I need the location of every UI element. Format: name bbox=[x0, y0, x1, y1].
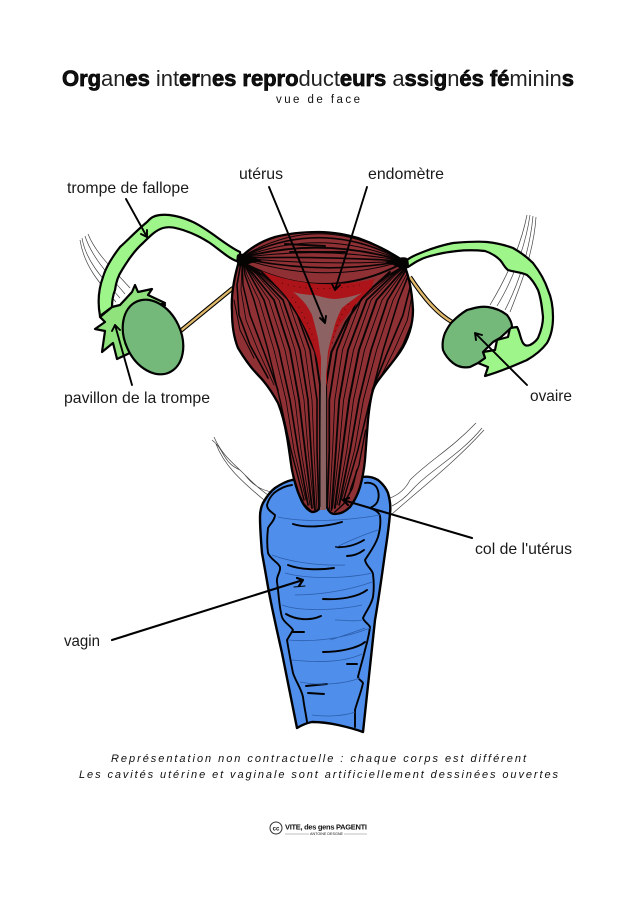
vagina bbox=[260, 477, 390, 732]
uterus bbox=[232, 232, 421, 514]
title: Organes internes reproducteurs assignés féminins bbox=[62, 66, 574, 91]
arrows bbox=[112, 187, 527, 640]
left ligament bbox=[178, 288, 233, 333]
arrow: uterus bbox=[269, 187, 326, 323]
arrow: vagina bbox=[112, 578, 303, 640]
right fallopian tube bbox=[407, 242, 553, 376]
right ovary bbox=[443, 307, 512, 367]
uterine horn knots bbox=[236, 254, 409, 270]
endometrium stipple bbox=[282, 283, 360, 345]
left fimbriae bbox=[95, 285, 165, 359]
muscle fibres bbox=[234, 234, 421, 512]
label: pavillon de la trompe: pavillon de la trompe bbox=[64, 390, 210, 407]
label: utérus: utérus bbox=[239, 166, 283, 183]
left tube bbox=[99, 215, 240, 316]
label: vagin: vagin bbox=[64, 633, 100, 650]
label: ovaire: ovaire bbox=[530, 388, 572, 405]
endometrium bbox=[262, 271, 375, 400]
right ligament bbox=[410, 277, 452, 322]
credit logo: VITE, des gens PAGENTI bbox=[285, 822, 367, 832]
arrow: ovary bbox=[475, 333, 527, 385]
uterus wall bbox=[232, 232, 413, 514]
arrow: fimbriae bbox=[112, 325, 132, 385]
credit logo: ANTOINE DESGNE bbox=[310, 832, 343, 836]
credit logo bbox=[270, 822, 367, 836]
ligament strands bbox=[80, 215, 536, 514]
label: trompe de fallope: trompe de fallope bbox=[67, 180, 189, 197]
uterus outline bbox=[232, 232, 413, 514]
label: col de l'utérus: col de l'utérus bbox=[475, 541, 572, 558]
uterine cavity bbox=[293, 292, 362, 510]
cervical slit edges bbox=[320, 395, 326, 507]
credit logo: cc bbox=[273, 826, 280, 832]
label: endomètre: endomètre bbox=[368, 166, 444, 183]
fine vaginal creases bbox=[272, 515, 380, 716]
left fallopian tube bbox=[95, 215, 240, 359]
subtitle: vue de face bbox=[276, 94, 360, 106]
caption: Représentation non contractuelle : chaque corps est différent bbox=[111, 753, 527, 765]
caption bbox=[79, 753, 558, 781]
arrow: endometrium bbox=[332, 187, 367, 290]
arrow: fallopian tube bbox=[126, 199, 147, 237]
arrow: cervix bbox=[343, 498, 472, 538]
fundus fibres bbox=[240, 234, 403, 284]
vaginal folds bbox=[267, 483, 380, 727]
caption: Les cavités utérine et vaginale sont artificiellement dessinées ouvertes bbox=[79, 769, 558, 781]
left ovary bbox=[111, 290, 195, 384]
